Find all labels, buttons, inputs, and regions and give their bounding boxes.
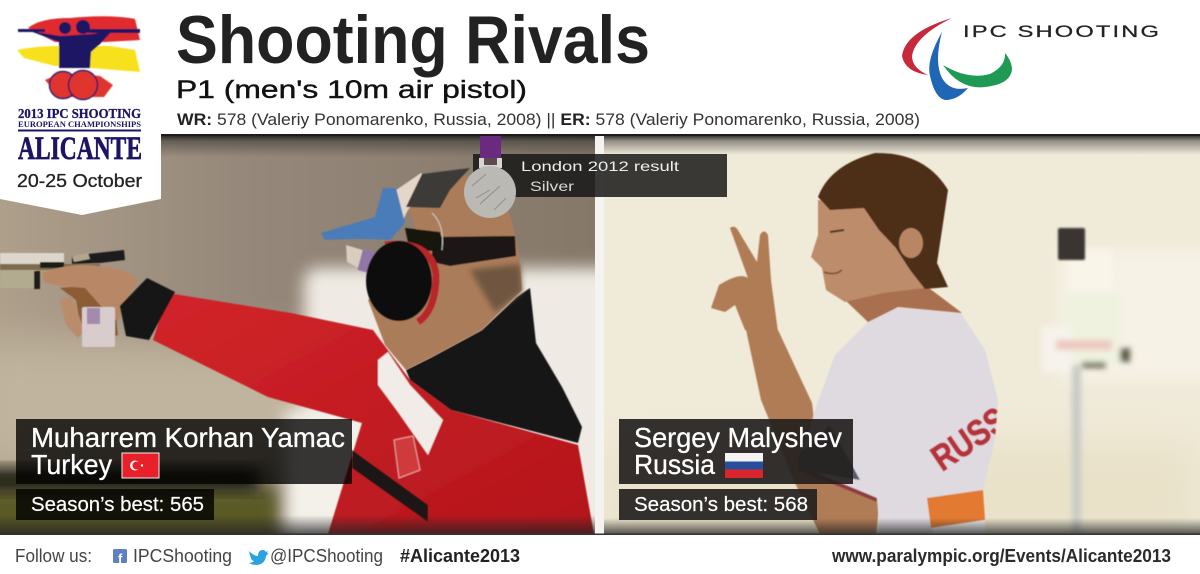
logo: IPC Shooting xyxy=(902,18,1161,100)
icon: facebook: f xyxy=(118,551,123,566)
footer bar xyxy=(0,534,1200,574)
panel: left athlete photo xyxy=(0,136,595,534)
icon: Russia flag xyxy=(725,453,763,478)
header rule xyxy=(160,134,1200,136)
panel: right athlete label: Sergey Malyshev xyxy=(634,422,842,453)
footer bar: Follow us: xyxy=(15,546,92,566)
panel: right athlete photo xyxy=(604,135,1200,550)
logo: Spanish flag brush xyxy=(17,16,140,100)
left season best: Season’s best: 565 xyxy=(31,494,204,516)
panel: event banner: EUROPEAN CHAMPIONSHIPS xyxy=(18,120,142,129)
footer bar: IPCShooting xyxy=(133,546,232,566)
pistol xyxy=(0,250,125,289)
panel: event banner xyxy=(0,0,161,215)
icon: facebook xyxy=(113,549,127,566)
panel: left athlete label: Turkey xyxy=(31,449,112,480)
panel: left athlete label xyxy=(16,419,352,484)
icon: twitter xyxy=(249,550,268,565)
panel: event banner: ALICANTE xyxy=(18,131,142,167)
records line: WR: 578 (Valeriy Ponomarenko, Russia, 2008) || ER: 578 (Valeriy Ponomarenko, Russia, 2008) xyxy=(177,110,920,129)
icon: Paralympic agitos xyxy=(902,18,1012,100)
red jacket arm and body xyxy=(120,278,594,534)
panel: right athlete label xyxy=(619,419,853,484)
target camera box xyxy=(1058,228,1085,260)
footer bar: @IPCShooting xyxy=(270,546,383,566)
shirt lettering: RUSS xyxy=(924,399,1014,479)
footer bar: www.paralympic.org/Events/Alicante2013 xyxy=(831,546,1171,566)
right season best: Season’s best: 568 xyxy=(634,494,808,516)
panel: right athlete label: Russia xyxy=(634,449,715,480)
target stand xyxy=(1042,326,1134,532)
divider xyxy=(595,135,604,534)
icon: silver medal xyxy=(464,136,516,218)
callout: London 2012 result: Silver xyxy=(530,178,574,194)
face and hair xyxy=(811,153,962,322)
right season best xyxy=(619,489,817,520)
raised arm and hand xyxy=(711,227,880,534)
title: Shooting Rivals xyxy=(176,2,650,78)
logo: IPC Shooting: IPC SHOOTING xyxy=(963,23,1161,41)
subtitle: P1 (men's 10m air pistol) xyxy=(176,76,527,104)
logo text: 2013 IPC SHOOTING xyxy=(18,107,141,122)
left season best xyxy=(16,489,214,520)
shirt xyxy=(804,308,998,534)
footer bar: #Alicante2013 xyxy=(400,546,520,566)
callout: London 2012 result: London 2012 result xyxy=(521,158,679,174)
shooter head xyxy=(321,168,522,370)
dates: 20-25 October xyxy=(17,171,142,191)
callout: London 2012 result xyxy=(473,154,727,197)
panel: left athlete label: Muharrem Korhan Yamac xyxy=(31,422,345,453)
shooter hand and grip xyxy=(42,265,138,347)
icon: Turkey flag xyxy=(122,453,159,478)
